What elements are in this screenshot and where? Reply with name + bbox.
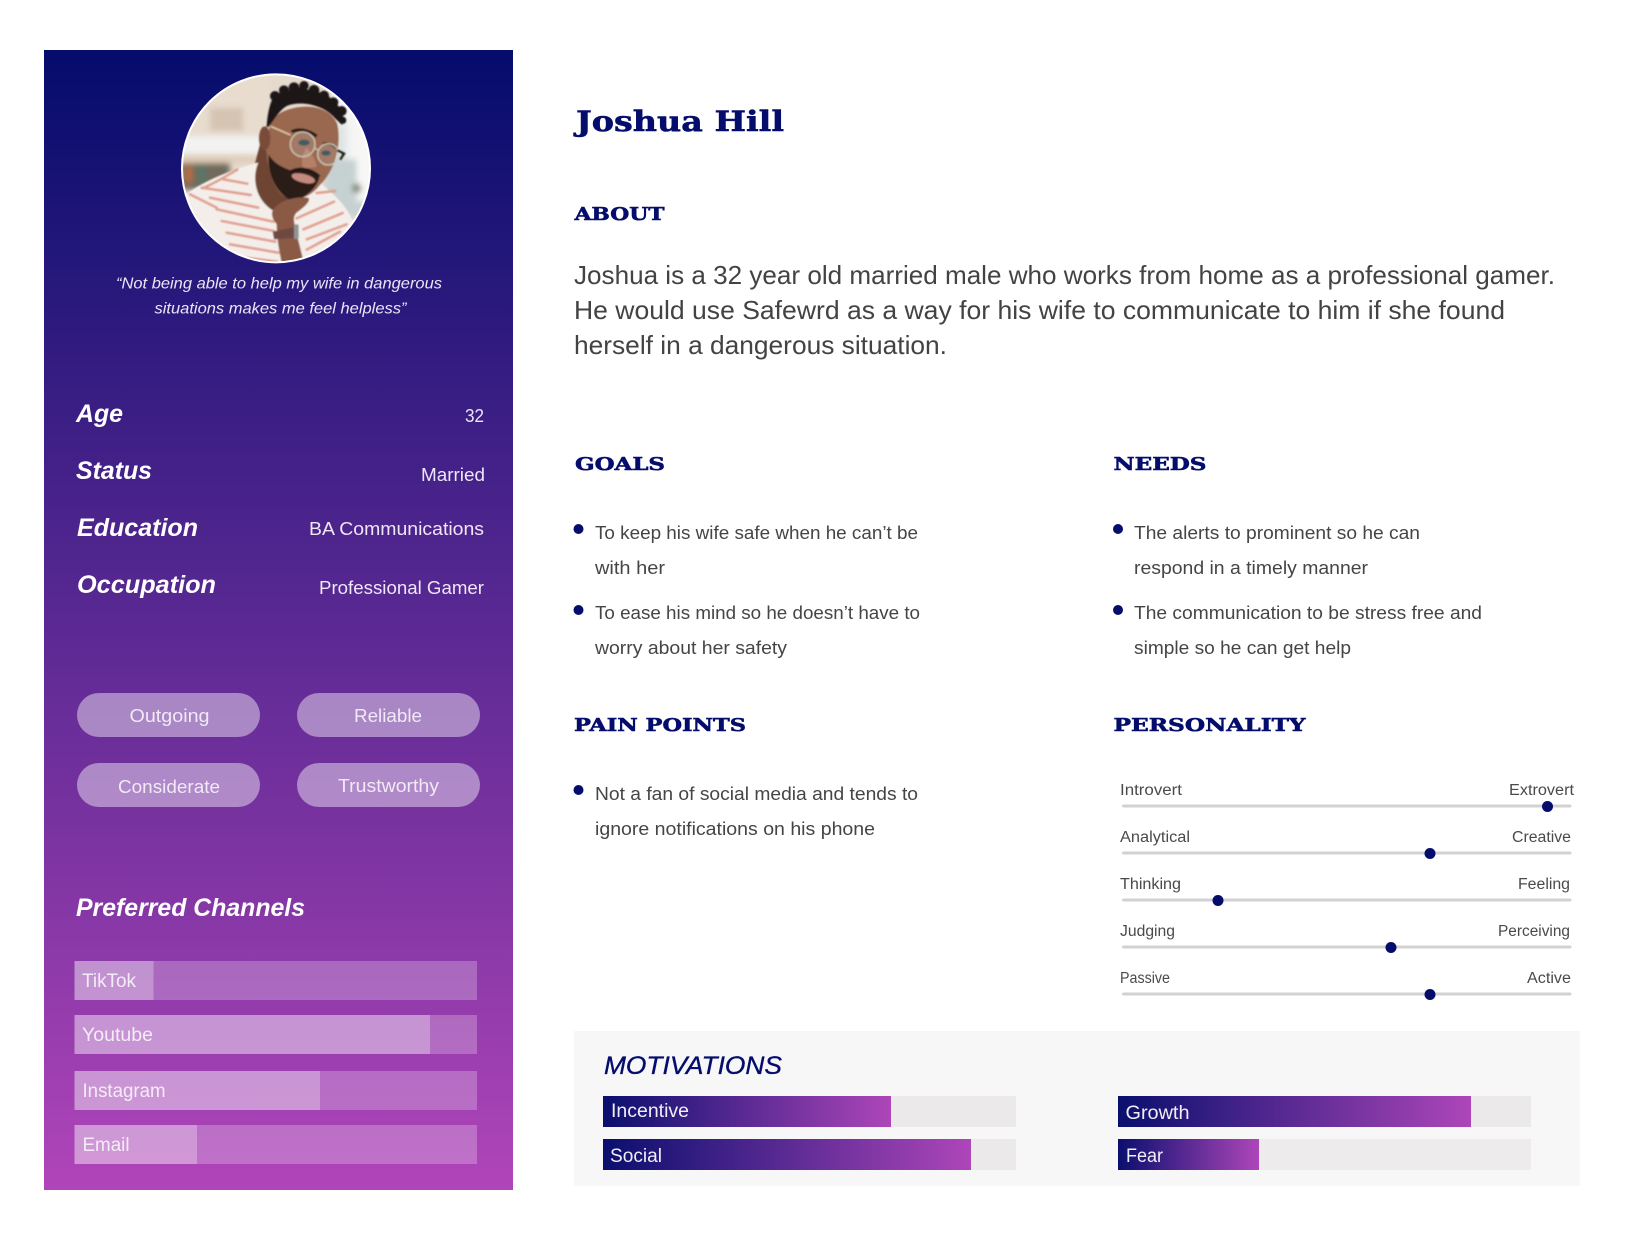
goals section: To keep his wife safe when he can’t be (595, 523, 918, 543)
motivations heading: MOTIVATIONS (604, 1052, 782, 1080)
slider: judging to perceiving (1120, 923, 1572, 953)
bar: growth (1118, 1096, 1531, 1127)
preferred channels bars: Youtube (82, 1025, 153, 1046)
profile facts: BA Communications (309, 519, 484, 539)
about text: Joshua is a 32 year old married male who works from home as a professional gamer. (574, 260, 1555, 290)
slider: analytical to creative (1120, 829, 1572, 859)
hair (267, 81, 347, 127)
needs section: The alerts to prominent so he can (1134, 523, 1420, 543)
profile facts: Status (76, 457, 152, 485)
slider: analytical to creative: Analytical (1120, 829, 1190, 846)
bar: incentive: Incentive (611, 1101, 689, 1122)
panel: motivations (574, 1031, 1580, 1186)
slider: introvert to extrovert (1120, 782, 1575, 812)
needs section: simple so he can get help (1134, 638, 1351, 658)
slider: judging to perceiving: Judging (1120, 923, 1175, 940)
preferred channels bars: Email (82, 1135, 130, 1156)
pain points section: Not a fan of social media and tends to (595, 784, 918, 804)
pain points section: PAIN POINTS (574, 715, 746, 736)
preferred channels bars: TikTok (82, 971, 136, 992)
slider: judging to perceiving: Perceiving (1498, 923, 1570, 940)
quote (116, 276, 442, 318)
personality section (1114, 715, 1575, 1000)
neck and chest (254, 144, 290, 211)
preferred channels heading: Preferred Channels (76, 894, 305, 922)
shirt (186, 162, 353, 262)
bar: social (603, 1139, 1016, 1170)
quote: “Not being able to help my wife in dangerous (116, 276, 442, 292)
bar: growth: Growth (1126, 1103, 1190, 1124)
about text: He would use Safewrd as a way for his wife to communicate to him if she found (574, 295, 1505, 325)
goals section (574, 454, 920, 658)
name title: Joshua Hill (572, 105, 784, 138)
trait pills (77, 693, 480, 807)
about heading: ABOUT (573, 204, 665, 225)
profile facts: Age (75, 400, 123, 428)
needs section: respond in a timely manner (1134, 558, 1368, 578)
portrait photo (181, 73, 371, 264)
bar: social: Social (610, 1146, 662, 1167)
goals section: GOALS (575, 454, 665, 475)
trait pills: Reliable (354, 705, 422, 726)
goals section: with her (594, 558, 665, 578)
glasses (271, 126, 339, 165)
head (266, 107, 339, 199)
pain points section: ignore notifications on his phone (595, 819, 875, 839)
personality section: PERSONALITY (1114, 715, 1307, 736)
eyes and brows (292, 130, 317, 136)
slider: passive to active: Active (1527, 970, 1571, 987)
profile facts: 32 (465, 406, 484, 426)
slider: thinking to feeling: Thinking (1120, 876, 1181, 893)
needs section: The communication to be stress free and (1134, 603, 1482, 623)
panel: profile sidebar (44, 50, 513, 1190)
slider: thinking to feeling (1120, 876, 1572, 906)
bar: fear: Fear (1126, 1146, 1164, 1167)
bar: incentive (603, 1096, 1016, 1127)
pain points section (574, 715, 918, 839)
profile facts: Married (421, 465, 485, 485)
preferred channels bars (74, 961, 477, 1164)
about text: herself in a dangerous situation. (574, 330, 947, 360)
trait pills: Considerate (118, 776, 220, 797)
slider: introvert to extrovert: Introvert (1120, 782, 1183, 799)
needs section: NEEDS (1114, 454, 1206, 475)
profile facts: Occupation (77, 571, 216, 599)
goals section: To ease his mind so he doesn’t have to (595, 603, 920, 623)
slider: introvert to extrovert: Extrovert (1509, 782, 1575, 799)
slider: thinking to feeling: Feeling (1518, 876, 1570, 893)
quote: situations makes me feel helpless” (154, 300, 407, 318)
slider: analytical to creative: Creative (1512, 829, 1571, 846)
trait pills: Outgoing (130, 705, 210, 726)
sidebar gradient background (44, 50, 513, 1190)
slider: passive to active (1120, 970, 1572, 1000)
profile facts (75, 400, 485, 599)
goals section: worry about her safety (594, 638, 787, 658)
about text (574, 260, 1555, 360)
preferred channels bars: Instagram (82, 1081, 166, 1102)
slider: passive to active: Passive (1120, 970, 1170, 987)
beard (268, 154, 319, 200)
profile facts: Education (77, 514, 198, 542)
trait pills: Trustworthy (338, 775, 440, 796)
needs section (1113, 454, 1482, 658)
hand and watch (272, 197, 309, 263)
bar: fear (1118, 1139, 1531, 1170)
ear (259, 126, 270, 150)
profile facts: Professional Gamer (319, 578, 484, 598)
